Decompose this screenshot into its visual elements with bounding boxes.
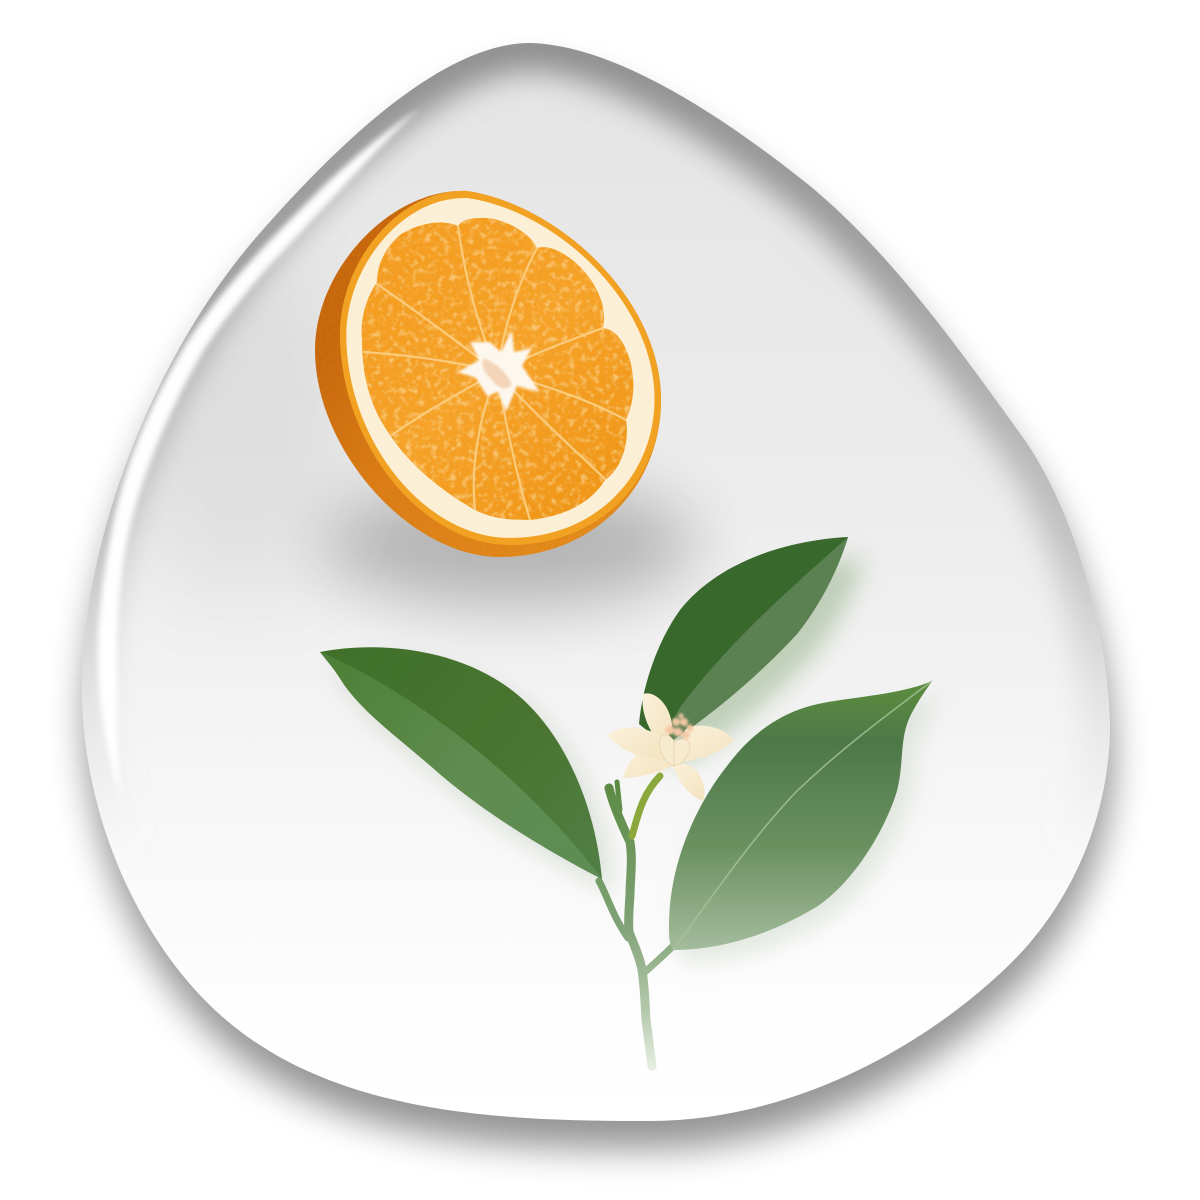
pistil [660, 735, 690, 766]
right leaf branch [645, 947, 672, 972]
main stem [609, 788, 652, 1066]
top right leaf [639, 537, 848, 740]
left leaf branch [599, 881, 628, 938]
stamens [666, 714, 694, 739]
plate rim shading [82, 43, 1110, 766]
stem [599, 782, 672, 1066]
plate left shade [162, 296, 328, 572]
plate highlight [98, 108, 420, 800]
orange half [310, 185, 666, 561]
petals [608, 693, 734, 801]
flower [608, 693, 734, 801]
orange rind rim [340, 191, 661, 545]
flower stalk [632, 776, 660, 836]
left leaf lower half [320, 652, 602, 879]
orange core [458, 330, 540, 412]
orange pith [346, 198, 655, 538]
right leaf midrib [673, 681, 932, 950]
left leaf [300, 647, 602, 900]
top right leaf right half [669, 538, 848, 740]
leaf shadows [332, 559, 942, 962]
bud stub [617, 782, 620, 810]
orange shadow [325, 483, 695, 607]
orange skin [310, 185, 666, 561]
plate shadow [85, 71, 1113, 1149]
plate [82, 43, 1110, 1121]
orange flesh [362, 218, 634, 520]
right leaf [669, 681, 932, 950]
segment membranes [364, 226, 626, 520]
